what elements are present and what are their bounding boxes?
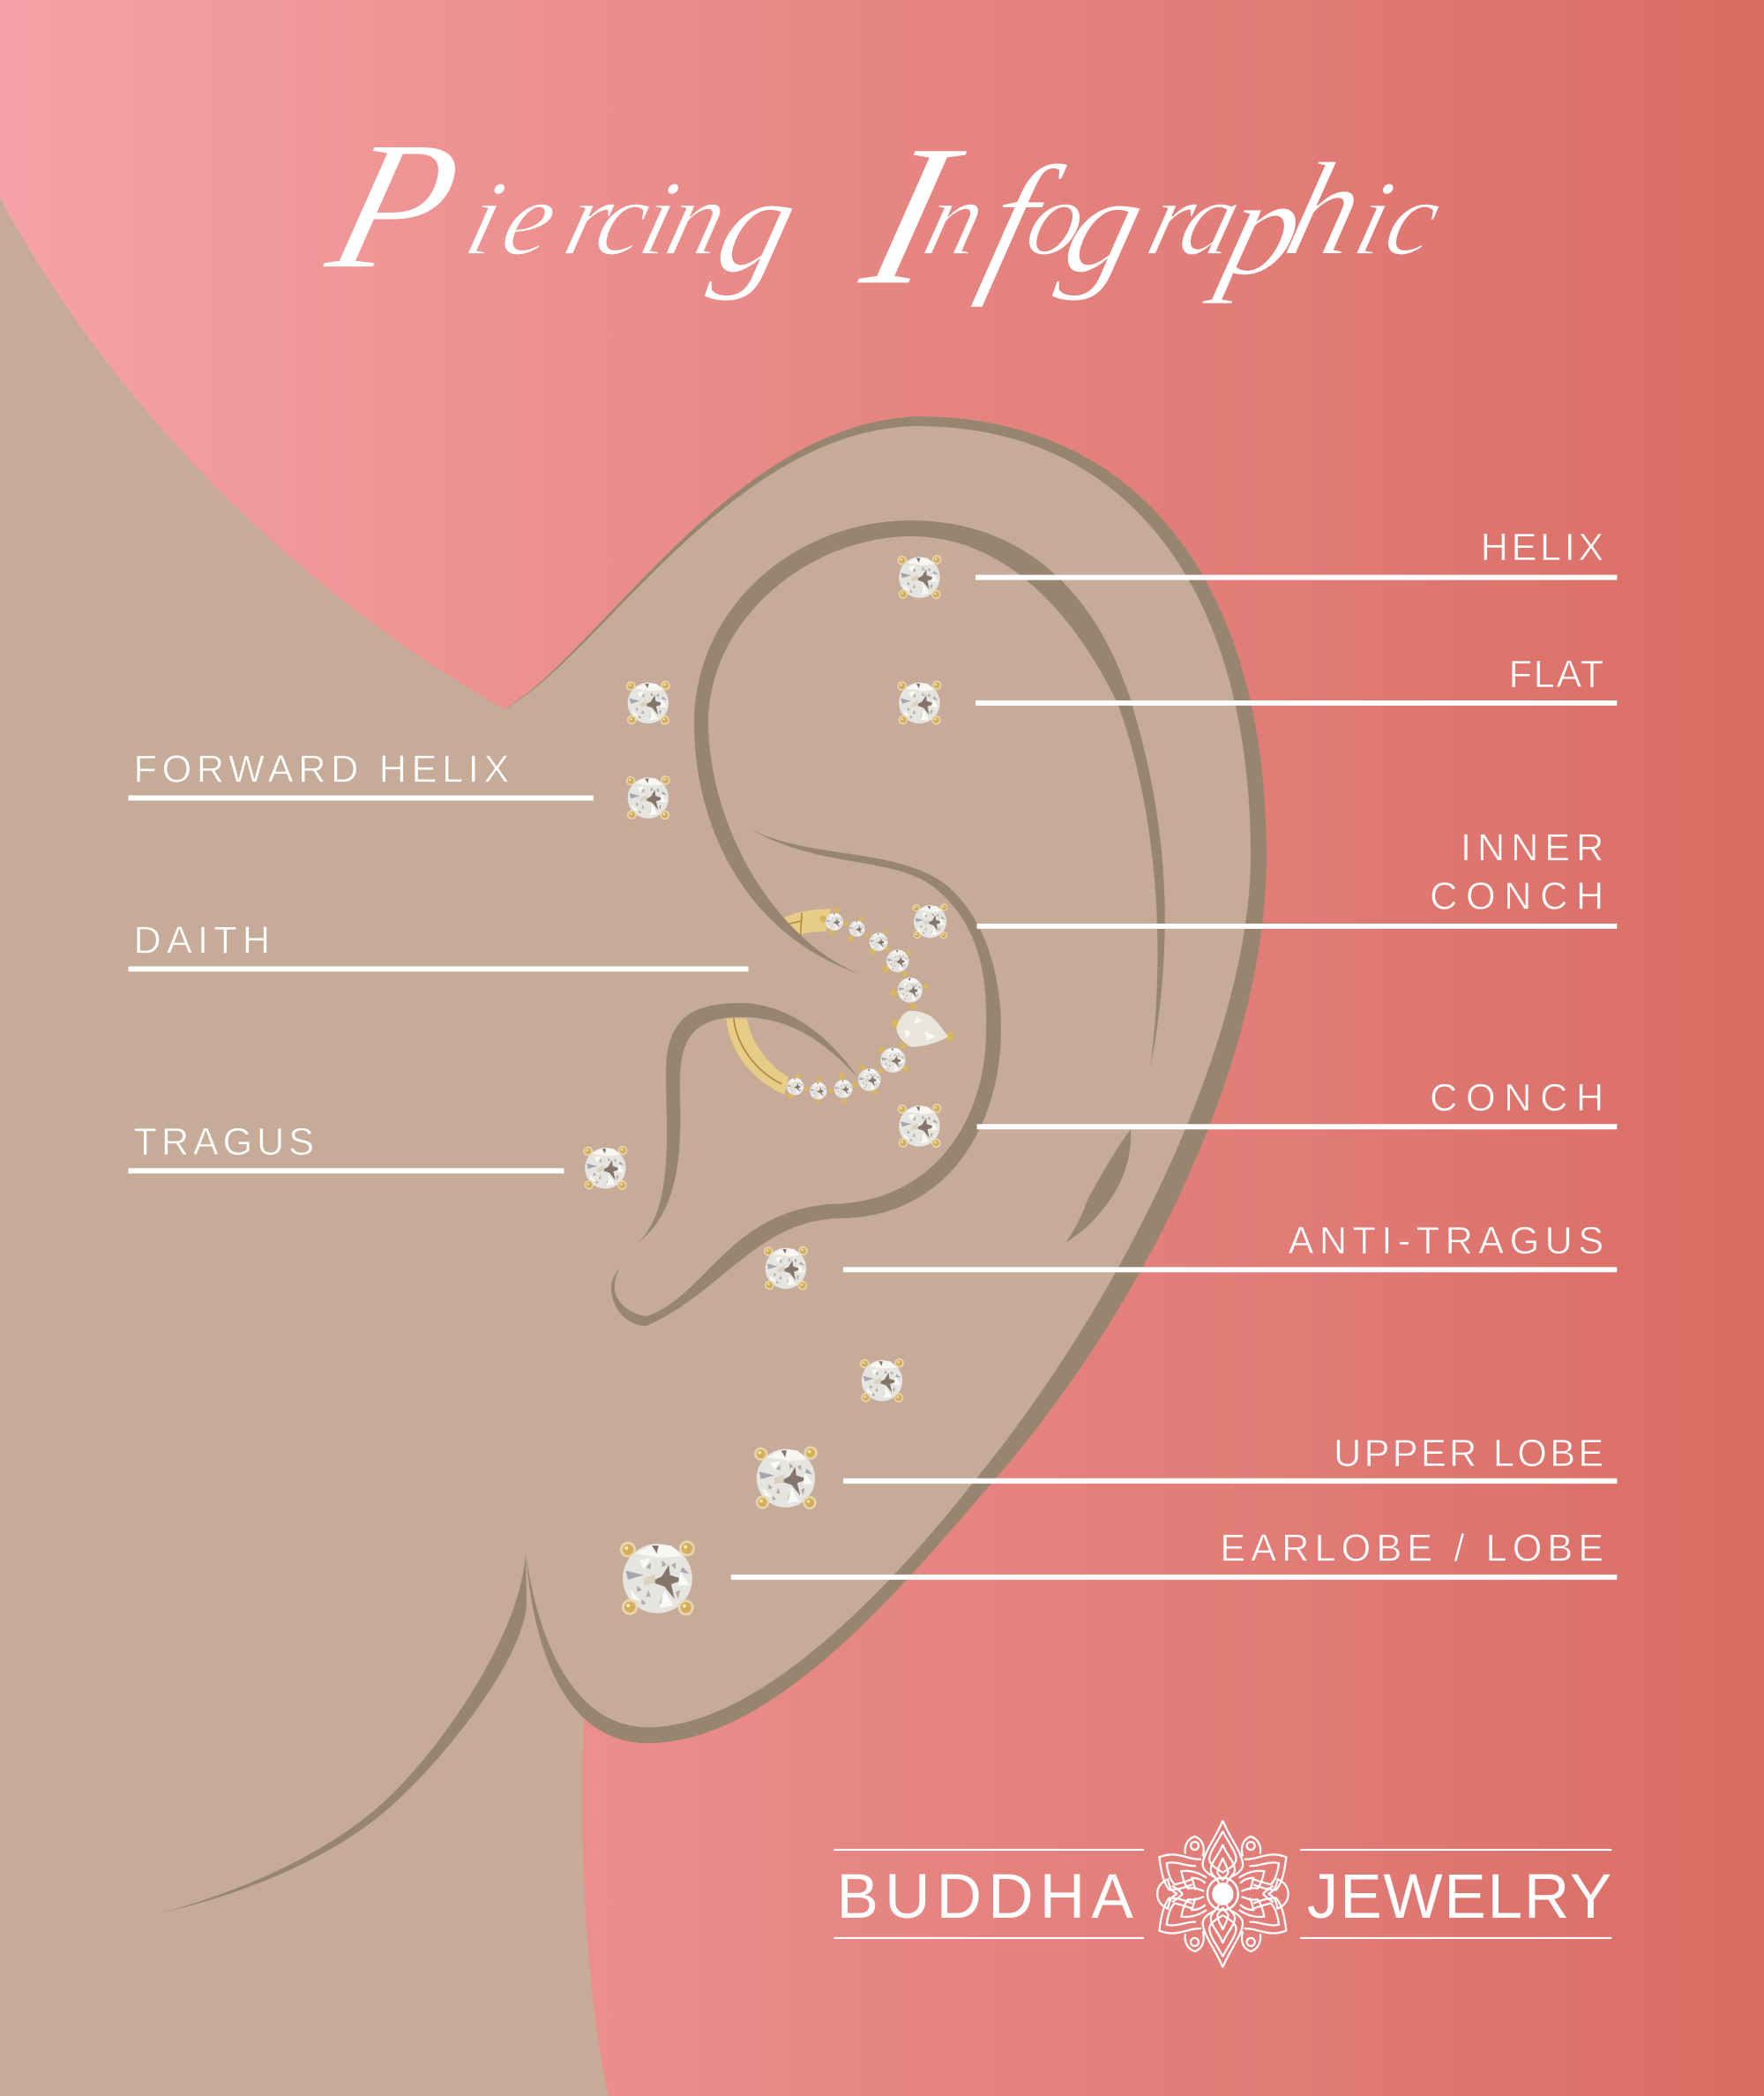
label: forward helix: FORWARD HELIX (134, 748, 509, 790)
stud: inner conch (913, 903, 948, 939)
stud: conch (897, 1104, 941, 1148)
stud: forward helix upper (626, 681, 670, 725)
lower shell fold (1065, 1129, 1131, 1243)
label: daith: DAITH (134, 919, 270, 962)
stud: tragus (583, 1146, 627, 1190)
tragus curve (638, 1003, 858, 1243)
title: c (585, 159, 664, 277)
conch curve (611, 829, 1001, 1326)
daith ring (gold band) (726, 909, 831, 1095)
title: i (1343, 159, 1405, 277)
title: f (968, 134, 1077, 309)
title: i (455, 159, 517, 277)
label: helix: HELIX (1481, 527, 1603, 569)
label: inner conch: INNER (1461, 827, 1603, 870)
ear outline (163, 416, 1267, 1913)
title: I (795, 102, 982, 327)
head and neck silhouette (0, 198, 1267, 2096)
title: r (1136, 159, 1211, 277)
stud: forward helix lower (626, 775, 670, 820)
title: i (629, 159, 690, 277)
stud: anti-tragus (764, 1246, 808, 1291)
logo: Buddha Jewelry (833, 1821, 1611, 1967)
label: flat: FLAT (1509, 654, 1603, 696)
title: a (1169, 159, 1254, 277)
outer rim of ear and lobe (505, 416, 1267, 1743)
title: r (554, 159, 628, 277)
stud: second lobe (860, 1359, 904, 1403)
label: anti-tragus: ANTI-TRAGUS (1289, 1220, 1603, 1262)
title: P (310, 103, 479, 308)
title: o (1015, 159, 1100, 277)
logo wordmark right: JEWELRY (1307, 1862, 1611, 1932)
neck line (163, 1553, 527, 1913)
daith ring stones (787, 907, 954, 1104)
title: e (491, 159, 571, 277)
title: c (1374, 159, 1454, 277)
label: upper lobe: UPPER LOBE (1334, 1433, 1603, 1475)
title: g (702, 147, 814, 303)
stud: earlobe (620, 1540, 695, 1615)
inner helix fold (694, 520, 1165, 1069)
stud: helix (897, 555, 941, 599)
title: n (913, 159, 998, 277)
title: g (1050, 147, 1162, 303)
title: p (1200, 150, 1321, 305)
icon: mandala (1157, 1821, 1289, 1967)
stud: upper lobe (754, 1447, 818, 1509)
label: conch: CONCH (1430, 1077, 1603, 1119)
label: inner conch: CONCH (1430, 875, 1603, 917)
title: n (655, 159, 741, 277)
logo wordmark left: BUDDHA (836, 1862, 1133, 1932)
label: earlobe / lobe: EARLOBE / LOBE (1220, 1528, 1603, 1570)
title: h (1273, 136, 1379, 283)
label: tragus: TRAGUS (134, 1121, 314, 1164)
stud: flat (897, 681, 941, 725)
logo rules (833, 1850, 1611, 1938)
label: inner conch (977, 827, 1617, 926)
